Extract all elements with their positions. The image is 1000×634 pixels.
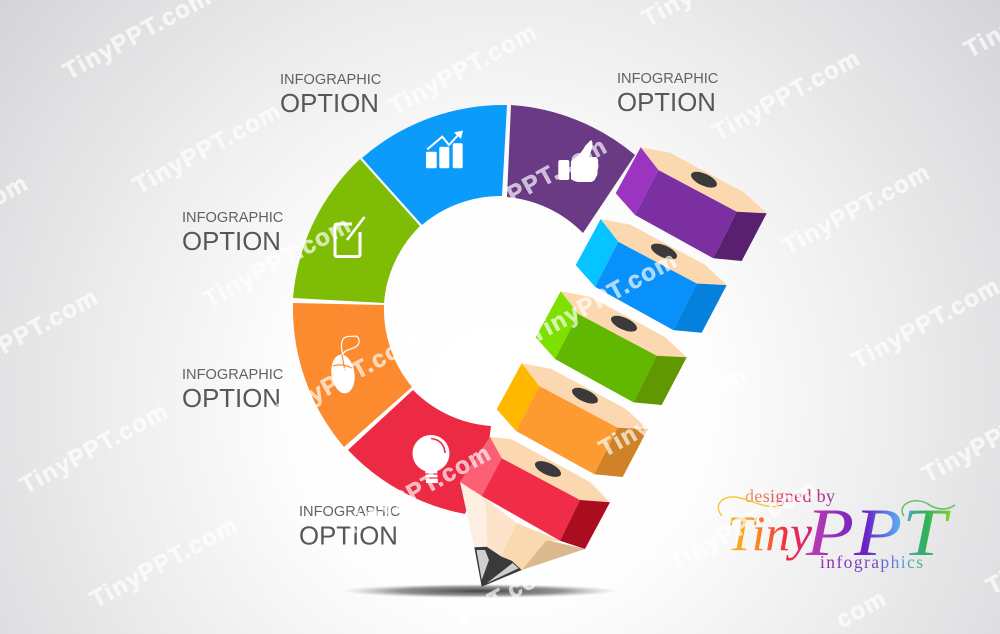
watermark: repeated TinyPPT.com: TinyPPT.com: [339, 439, 496, 541]
watermark: repeated TinyPPT.com: TinyPPT.com: [525, 246, 682, 348]
pencil section: green: [536, 291, 687, 405]
logo: designed by Tiny PPT infographics: infographics: [820, 552, 923, 572]
watermark: repeated TinyPPT.com: TinyPPT.com: [269, 325, 426, 427]
label: bottom: [299, 504, 400, 550]
label: top right: [617, 71, 718, 117]
watermark: repeated TinyPPT.com: TinyPPT.com: [199, 211, 356, 313]
pencil section: orange: [497, 363, 648, 477]
ground shadow under pencil tip: [342, 584, 618, 598]
label: top right: OPTION: [617, 89, 716, 117]
label: lower left: [182, 367, 283, 413]
icon: light bulb: [412, 435, 450, 483]
label: top right: INFOGRAPHIC: [617, 71, 718, 87]
label: bottom: INFOGRAPHIC: [299, 504, 400, 520]
icon: note and pencil: [335, 217, 364, 256]
pencil section: purple: [616, 147, 767, 261]
icon: computer mouse: [329, 336, 359, 395]
label: top left: [280, 72, 381, 118]
label: upper left: [182, 210, 283, 256]
segment: purple: [507, 105, 635, 233]
segment: blue: [362, 105, 507, 225]
icon: thumbs up: [558, 140, 598, 182]
watermark: repeated TinyPPT.com: TinyPPT.com: [385, 18, 542, 120]
watermark: repeated TinyPPT.com: TinyPPT.com: [708, 44, 865, 146]
watermark: repeated TinyPPT.com: PPT.com: [453, 555, 562, 631]
watermark: repeated TinyPPT.com: TinyPPT.com: [129, 97, 286, 199]
watermark: repeated TinyPPT.com: TinyPPT.com: [455, 132, 612, 234]
watermark: repeated TinyPPT.com: com: [832, 585, 892, 634]
circular pencil body ring: [293, 105, 635, 514]
logo: designed by Tiny PPT infographics: designed by: [745, 486, 835, 506]
logo: designed by Tiny PPT infographics: PPT: [805, 494, 951, 570]
segment: red: [348, 390, 491, 514]
watermark: repeated TinyPPT.com: TinyPPT.com: [16, 397, 173, 499]
logo: designed by Tiny PPT infographics: [718, 486, 955, 572]
label: lower left: OPTION: [182, 385, 281, 413]
watermark: repeated TinyPPT.com: TinyPPT.com: [665, 474, 822, 576]
watermark: repeated TinyPPT.com: TinyPPT.com: [595, 360, 752, 462]
label: upper left: OPTION: [182, 228, 281, 256]
sharpened wood cone: [460, 482, 585, 570]
pencil section: blue: [576, 219, 727, 333]
watermark: repeated TinyPPT.com: TinyPPT.com: [778, 158, 935, 260]
pencil section: red with sharpened tip: [460, 437, 610, 587]
watermark: repeated TinyPPT.com: TinyPPT.com: [86, 511, 243, 613]
graphite lead: [474, 547, 522, 587]
label: lower left: INFOGRAPHIC: [182, 367, 283, 383]
segment: orange: [293, 303, 412, 447]
logo: designed by Tiny PPT infographics: Tiny: [727, 505, 813, 561]
label: upper left: INFOGRAPHIC: [182, 210, 283, 226]
label: bottom: OPTION: [299, 522, 398, 550]
label: top left: OPTION: [280, 90, 379, 118]
label: top left: INFOGRAPHIC: [280, 72, 381, 88]
icon: bar chart with arrow: [426, 130, 463, 168]
segment: green: [293, 159, 420, 303]
